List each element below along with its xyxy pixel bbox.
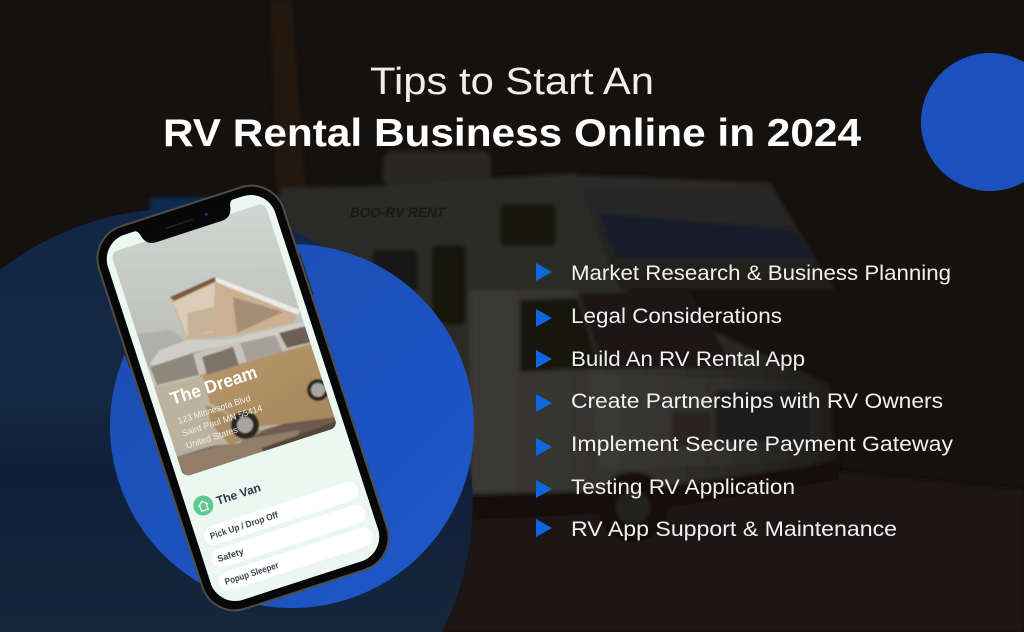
blue circle behind phone (110, 244, 474, 608)
van photo card (112, 204, 336, 476)
photo caption: The Dream: United States (184, 424, 239, 451)
photo caption: The Dream (169, 369, 262, 448)
tip 5: Implement Secure Payment Gateway (571, 433, 954, 456)
menu row: Safety (209, 502, 368, 570)
dark navy circle: lower left (0, 208, 473, 632)
title: RV Rental Business Online in 2024 (163, 112, 861, 155)
background: dimmed RV parked in forest: BOO-RV RENT (350, 204, 446, 220)
menu row: Safety: Safety (216, 546, 245, 564)
photo caption: The Dream: The Dream (168, 362, 260, 409)
photo caption: The Dream: 123 Minnesota Blvd (176, 393, 252, 426)
tip 6: Testing RV Application (571, 476, 795, 499)
tip 3: Build An RV Rental App (571, 348, 805, 371)
title: Tips to Start An (370, 61, 654, 103)
icon: green home badge (193, 496, 214, 516)
menu row: Pick Up / Drop Off (204, 482, 358, 545)
menu row: Pick Up / Drop Off: Pick Up / Drop Off (209, 509, 280, 541)
phone mockup (96, 184, 390, 612)
title (163, 61, 861, 155)
decorative circle: top right (921, 53, 1024, 191)
tip 2: Legal Considerations (571, 305, 782, 328)
tip 1: Market Research & Business Planning (571, 262, 951, 285)
phone screen (106, 195, 380, 601)
menu row: Popup Sleeper (216, 525, 375, 593)
tips list (536, 262, 954, 541)
phone notch (132, 198, 240, 248)
menu row: Popup Sleeper: Popup Sleeper (223, 560, 280, 587)
tip 4: Create Partnerships with RV Owners (571, 390, 943, 413)
tip 7: RV App Support & Maintenance (571, 518, 897, 541)
photo caption: The Dream: Saint Paul MN 55414 (180, 403, 263, 438)
heading: The Van: The Van (214, 480, 263, 508)
